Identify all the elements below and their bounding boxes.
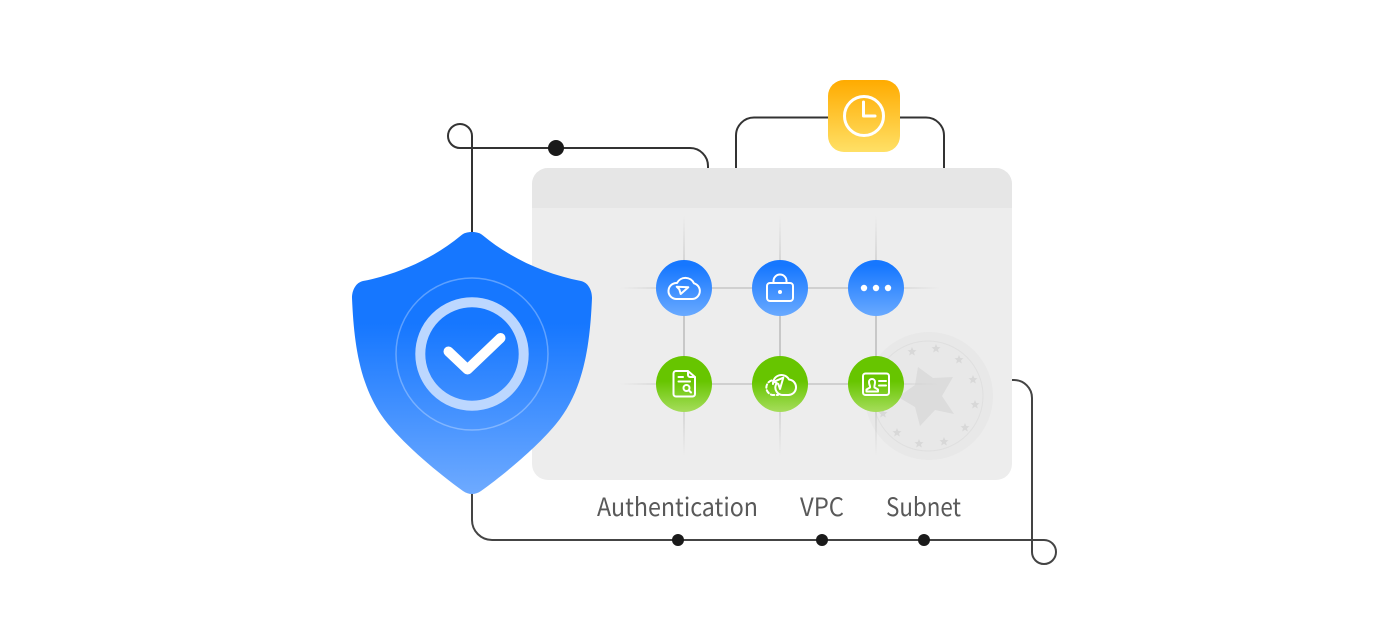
- node: VPC dot: [816, 534, 828, 546]
- icon grid lines: [620, 216, 940, 456]
- icon: more dots: [848, 260, 904, 316]
- icon: document search: [656, 356, 712, 412]
- panel: window: [532, 168, 1012, 480]
- icon: cloud transfer: [752, 356, 808, 412]
- icon: cloud with arrow: [656, 260, 712, 316]
- seal watermark: [865, 332, 993, 460]
- panel body: [532, 168, 1012, 480]
- label: Subnet: Subnet: [886, 488, 962, 524]
- shield outer ring: [396, 278, 548, 430]
- label: VPC: VPC: [800, 488, 844, 524]
- node: top dot: [548, 140, 564, 156]
- connector: top left loop line: [448, 124, 708, 240]
- icon: id card: [848, 356, 904, 412]
- connector: bottom line with loop: [472, 380, 1056, 564]
- label: Authentication: Authentication: [597, 488, 758, 524]
- check mark: [448, 338, 500, 370]
- shield inner ring: [420, 302, 524, 406]
- connector: top right bracket line: [736, 118, 944, 170]
- shield: [352, 232, 592, 494]
- node: Subnet dot: [918, 534, 930, 546]
- node: Authentication dot: [672, 534, 684, 546]
- icon: lock: [752, 260, 808, 316]
- icon: clock tile: [828, 80, 900, 152]
- panel header bar: [532, 168, 1012, 208]
